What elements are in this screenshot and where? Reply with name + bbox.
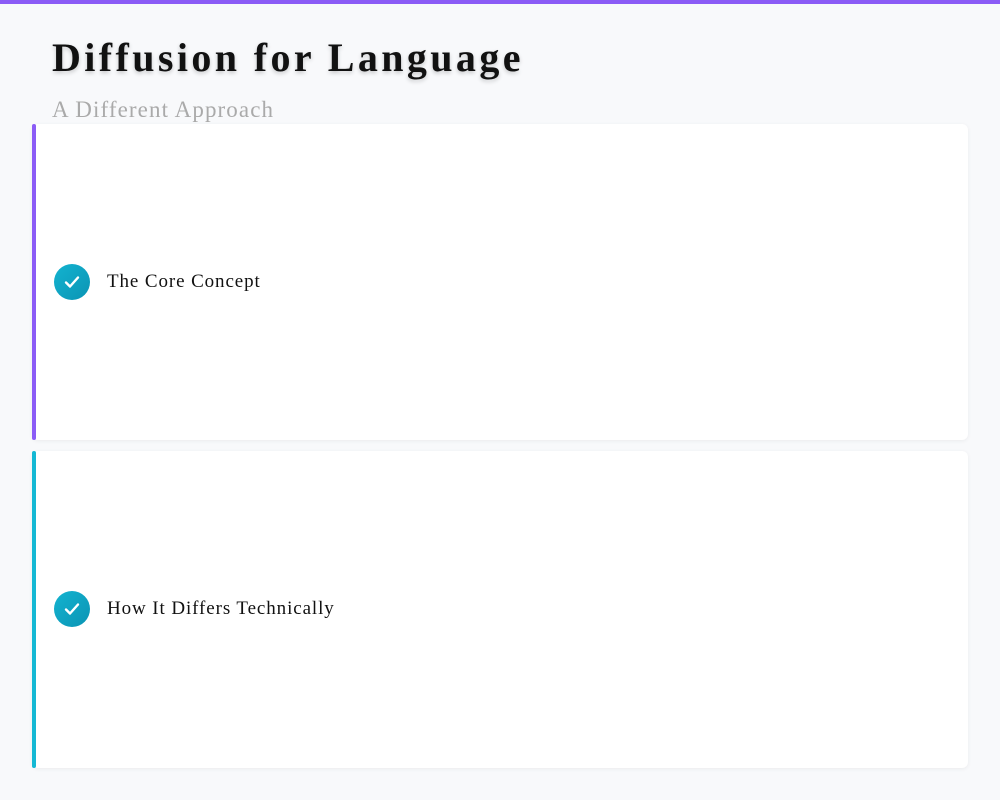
item: how it differs: How It Differs Technically	[107, 598, 335, 619]
icon: check	[54, 264, 90, 300]
item: how it differs	[54, 591, 335, 627]
title: Diffusion for Language	[52, 35, 524, 80]
subtitle: A Different Approach	[52, 97, 274, 122]
panel: core concept	[32, 124, 968, 440]
item: core concept	[54, 264, 261, 300]
panel: technical differences	[32, 451, 968, 768]
item: core concept: The Core Concept	[107, 271, 261, 292]
icon: check	[54, 591, 90, 627]
